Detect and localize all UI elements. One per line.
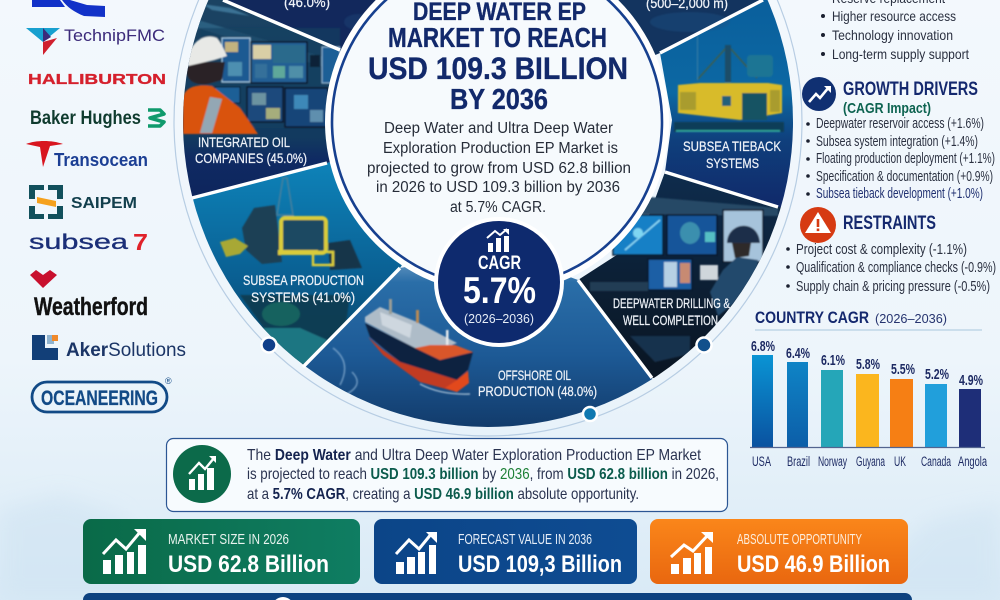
bar values: 5.8% — [856, 357, 880, 373]
panel: market segment wheel — [183, 0, 793, 427]
panel: country CAGR bar chart: COUNTRY CAGR — [755, 308, 869, 327]
logo: Baker Hughes: Baker Hughes — [30, 108, 141, 129]
bar values: 5.5% — [891, 362, 915, 378]
title: BY 2036 — [450, 84, 548, 116]
callout text — [247, 447, 719, 503]
panel: central title circle — [325, 0, 669, 294]
panel: country CAGR bar chart: (2026–2036) — [875, 311, 947, 326]
icon: chart — [396, 532, 437, 574]
logo: Saipem: SAIPEM — [71, 195, 137, 212]
logo: Oceaneering — [32, 376, 172, 412]
title: MARKET TO REACH — [388, 22, 607, 53]
segment labels: SUBSEA PRODUCTION — [243, 272, 364, 288]
logo: top partial — [32, 0, 105, 17]
bar labels: Norway — [818, 454, 847, 469]
logo: Oceaneering: OCEANEERING — [41, 387, 158, 410]
segment: top right — [618, 0, 760, 55]
logo: Aker Solutions: AkerSolutions — [66, 340, 186, 361]
bar values: 6.1% — [821, 353, 845, 369]
icon: chart — [671, 532, 713, 574]
icon: growth chart — [487, 229, 509, 252]
card: market size in 2026: MARKET SIZE IN 2026 — [168, 532, 289, 548]
bar values: 5.2% — [925, 367, 949, 383]
logo: Subsea 7: subsea — [29, 231, 128, 254]
badge: CAGR: CAGR — [478, 253, 521, 274]
card: absolute opportunity: USD 46.9 Billion — [737, 551, 890, 578]
bar values: 6.4% — [786, 346, 810, 362]
icon: growth chart in green circle — [173, 445, 231, 503]
bar values: 6.8% — [751, 339, 775, 355]
bar labels: UK — [894, 454, 906, 469]
segment labels: PRODUCTION (48.0%) — [478, 383, 597, 399]
panel: restraints: RESTRAINTS — [843, 213, 936, 234]
segment labels: SUBSEA TIEBACK — [683, 138, 782, 154]
description text: Exploration Production EP Market is — [383, 140, 618, 157]
logo: Weatherford — [30, 270, 148, 321]
logo: TechnipFMC — [26, 26, 165, 55]
description text: at 5.7% CAGR. — [450, 199, 546, 216]
segment labels — [195, 0, 782, 399]
description text: Deep Water and Ultra Deep Water — [384, 120, 613, 137]
logo: Transocean — [26, 141, 148, 170]
segment: top left — [228, 0, 376, 50]
segment labels: OFFSHORE OIL — [498, 367, 571, 383]
bar labels: USA — [752, 454, 771, 469]
wheel dots — [262, 338, 712, 421]
segment labels: SYSTEMS (41.0%) — [251, 289, 355, 305]
bottom banner — [83, 593, 912, 600]
panel: restraints — [786, 207, 996, 295]
panel: company logos — [26, 0, 186, 412]
thin outer ring — [174, 0, 802, 436]
badge: CAGR — [434, 217, 564, 347]
panel: opportunity list — [821, 0, 969, 62]
description text — [367, 120, 631, 216]
panel: country CAGR bar chart — [750, 308, 987, 469]
segment labels: COMPANIES (45.0%) — [195, 150, 307, 166]
card: market size in 2026 — [83, 519, 360, 584]
bar labels: Guyana — [856, 454, 885, 469]
icon: rising arrow — [802, 77, 836, 111]
bar labels — [752, 454, 987, 469]
logo: Transocean: Transocean — [54, 150, 148, 170]
panel: opportunity list: Long-term supply support — [832, 46, 969, 62]
panel: growth drivers — [802, 77, 995, 202]
logo: Aker Solutions — [32, 335, 186, 361]
bar labels: Angola — [958, 454, 987, 469]
segment labels: WELL COMPLETION — [623, 312, 718, 328]
bar labels: Canada — [921, 454, 951, 469]
title: USD 109.3 BILLION — [368, 50, 628, 86]
panel: summary callout — [166, 438, 728, 512]
logo: TechnipFMC: TechnipFMC — [64, 26, 165, 45]
badge: CAGR: (2026–2036) — [464, 311, 534, 326]
segment: subsea production systems — [193, 162, 402, 368]
bars — [752, 355, 981, 447]
segment dividers — [192, 0, 778, 378]
callout text: The Deep Water and Ultra Deep Water Exploration Production EP Market — [247, 447, 701, 464]
card: forecast value in 2036: USD 109,3 Billion — [458, 551, 622, 578]
bar labels: Brazil — [787, 454, 810, 469]
card: forecast value in 2036: FORECAST VALUE IN 2036 — [458, 532, 592, 548]
bar values: 4.9% — [959, 373, 983, 389]
logo: Halliburton: HALLIBURTON — [28, 71, 166, 88]
callout text: is projected to reach USD 109.3 billion by 2036, from USD 62.8 billion in 2026, — [247, 466, 719, 483]
logo: Subsea 7 — [29, 229, 148, 255]
segment labels: SYSTEMS — [706, 155, 759, 171]
logo: Saipem — [29, 185, 137, 219]
segment: integrated oil companies — [183, 0, 342, 196]
panel: opportunity list: Higher resource access — [832, 8, 956, 24]
title — [368, 0, 628, 116]
icon: warning — [800, 207, 836, 243]
segment labels: INTEGRATED OIL — [198, 134, 290, 150]
description text: projected to grow from USD 62.8 billion — [367, 160, 631, 177]
card: market size in 2026: USD 62.8 Billion — [168, 551, 329, 578]
segment: subsea tieback systems — [660, 0, 793, 207]
card: forecast value in 2036 — [374, 519, 637, 584]
icon: chart — [103, 529, 146, 574]
bar values — [751, 339, 983, 389]
segment labels: DEEPWATER DRILLING & — [613, 295, 730, 311]
panel: opportunity list: Technology innovation — [832, 27, 953, 43]
description text: in 2026 to USD 109.3 billion by 2036 — [376, 179, 620, 196]
logo: Oceaneering: ® — [165, 376, 172, 386]
segment: deepwater drilling and well completion — [578, 172, 781, 378]
badge: CAGR: 5.7% — [463, 270, 536, 311]
card: absolute opportunity: ABSOLUTE OPPORTUNITY — [737, 532, 862, 548]
segment: offshore oil production — [306, 267, 652, 427]
logo: Subsea 7: 7 — [133, 229, 148, 255]
callout text: at a 5.7% CAGR, creating a USD 46.9 billion absolute opportunity. — [247, 486, 639, 503]
logo: Weatherford: Weatherford — [34, 293, 148, 321]
card: absolute opportunity — [650, 519, 908, 584]
panel: growth drivers: (CAGR Impact) — [843, 100, 931, 117]
